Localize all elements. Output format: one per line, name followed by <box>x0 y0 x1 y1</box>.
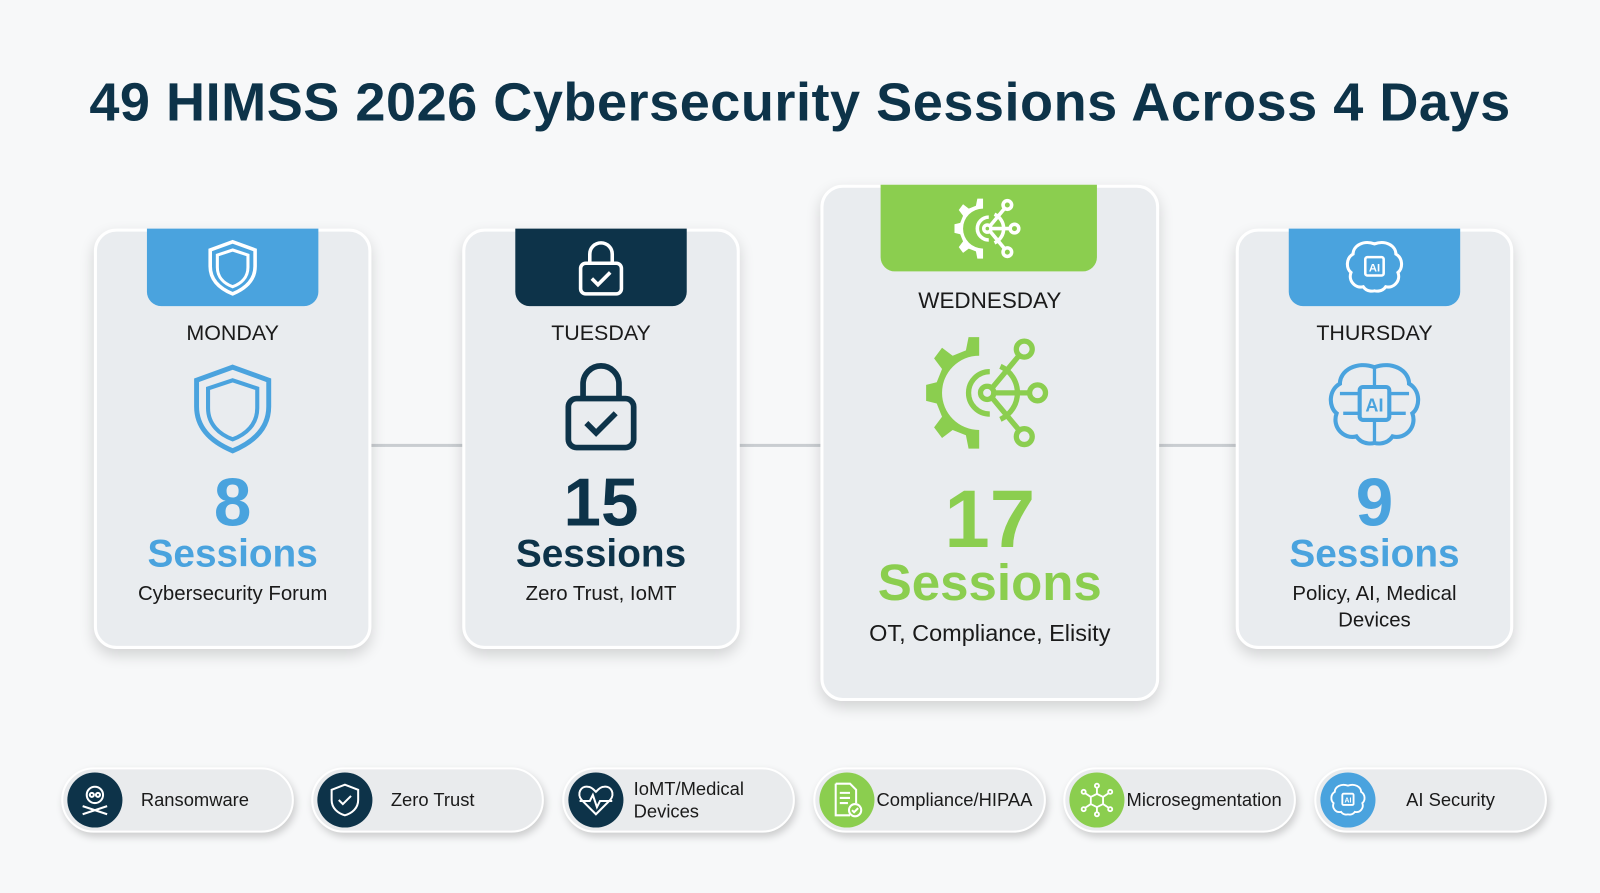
legend pill: ransomware: Ransomware <box>141 790 249 810</box>
icon: gear network large <box>926 337 1048 449</box>
legend pill: ransomware <box>61 767 294 833</box>
icon: shield large <box>194 364 272 454</box>
legend pill: ai security: AI Security <box>1406 790 1495 810</box>
panel: thursday: THURSDAY <box>1316 321 1433 345</box>
icon: lock large <box>566 363 637 450</box>
panel: thursday: Devices <box>1338 609 1411 632</box>
tab icon: AI brain: AI <box>1369 262 1380 274</box>
legend pill: iomt <box>562 767 795 833</box>
panel: monday: MONDAY <box>186 321 279 345</box>
tab icon: AI brain <box>1289 229 1460 306</box>
legend pill: zero trust: Zero Trust <box>391 790 475 810</box>
legend pill: microsegmentation <box>1063 767 1296 833</box>
legend pill: ai security: AI <box>1345 797 1351 804</box>
panel: monday: Cybersecurity Forum <box>138 583 327 605</box>
panel: monday: Sessions <box>148 533 318 576</box>
icon: AI brain large: AI <box>1365 396 1384 416</box>
panel: tuesday <box>462 229 740 649</box>
panel: wednesday: WEDNESDAY <box>918 288 1061 313</box>
panel: wednesday: 17 <box>944 473 1035 564</box>
legend pill: zero trust <box>311 767 544 833</box>
panel: monday: 8 <box>214 464 251 540</box>
panel: wednesday: OT, Compliance, Elisity <box>869 619 1110 646</box>
tab icon: lock <box>515 229 687 306</box>
legend pill: iomt: IoMT/Medical <box>634 779 744 799</box>
legend pill: microsegmentation: Microsegmentation <box>1127 790 1282 810</box>
legend pill: ai security <box>1314 767 1547 833</box>
panel: tuesday: TUESDAY <box>551 321 651 345</box>
panel: thursday: Policy, AI, Medical <box>1292 583 1457 605</box>
legend pill: iomt: Devices <box>634 801 699 821</box>
panel: thursday: Sessions <box>1289 533 1460 576</box>
panel: wednesday <box>820 185 1159 701</box>
tab icon: gear network <box>881 185 1097 271</box>
icon: AI brain large <box>1328 363 1420 446</box>
legend pill: compliance <box>813 767 1046 833</box>
panel: thursday: 9 <box>1356 464 1393 540</box>
panel: tuesday: Zero Trust, IoMT <box>526 583 676 605</box>
tab icon: shield <box>147 229 318 306</box>
panel: thursday <box>1236 229 1513 649</box>
panel: tuesday: 15 <box>564 464 638 540</box>
panel: tuesday: Sessions <box>516 533 686 576</box>
panel: monday <box>94 229 371 649</box>
legend pill: compliance: Compliance/HIPAA <box>877 790 1032 810</box>
title: 49 HIMSS 2026 Cybersecurity Sessions Across 4 Days <box>89 72 1511 133</box>
panel: wednesday: Sessions <box>878 554 1102 611</box>
